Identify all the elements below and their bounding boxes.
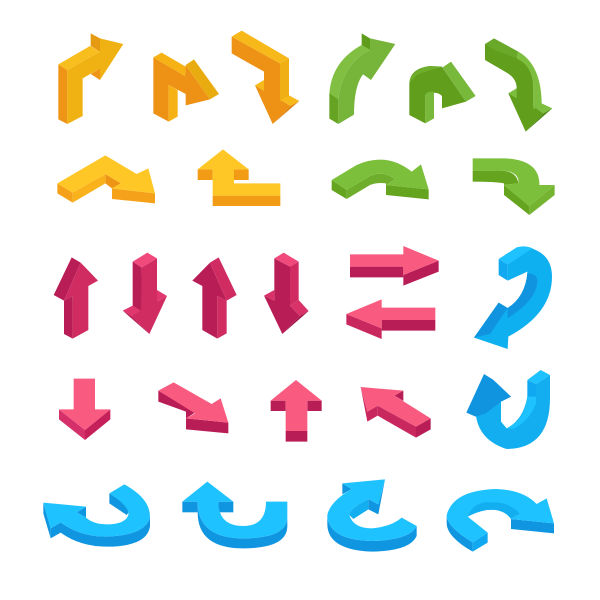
orange arrow: up then right xyxy=(58,33,123,124)
blue flat arrow: curve to left xyxy=(43,484,150,547)
magenta arrow: up, dark front xyxy=(192,257,237,339)
blue flat arrow: curl up-right xyxy=(327,479,417,552)
green flat curved arrow: right then down xyxy=(473,158,555,215)
pink flat arrow: down-right xyxy=(158,382,228,433)
pink flat arrow: down xyxy=(59,379,110,440)
green curved arrow: right then down xyxy=(485,38,552,132)
pink flat arrow: left xyxy=(346,299,435,339)
magenta arrow: down, light front xyxy=(123,253,167,334)
blue flat arrow: arc to right xyxy=(447,489,554,552)
blue arrow: curl up-left xyxy=(466,370,550,449)
magenta arrow: up, shaded left head xyxy=(54,257,98,339)
orange arrow: right then down xyxy=(232,31,299,124)
yellow flat arrow: left then up xyxy=(198,149,280,206)
green curved arrow: up then right xyxy=(329,33,395,124)
blue flat arrow: U-turn up xyxy=(182,482,287,548)
green flat curved arrow: bump right xyxy=(332,160,429,199)
green curved arrow: hook right xyxy=(409,62,476,123)
pink flat arrow: up xyxy=(271,380,322,442)
pink flat arrow: up-left xyxy=(361,387,431,438)
blue arrow: curl down-left xyxy=(474,246,552,349)
orange arrow: up, over and down-right xyxy=(153,53,219,122)
magenta arrow: down, dark front xyxy=(264,253,309,334)
pink flat arrow: right xyxy=(350,246,439,286)
yellow flat arrow: zigzag right xyxy=(57,155,155,203)
